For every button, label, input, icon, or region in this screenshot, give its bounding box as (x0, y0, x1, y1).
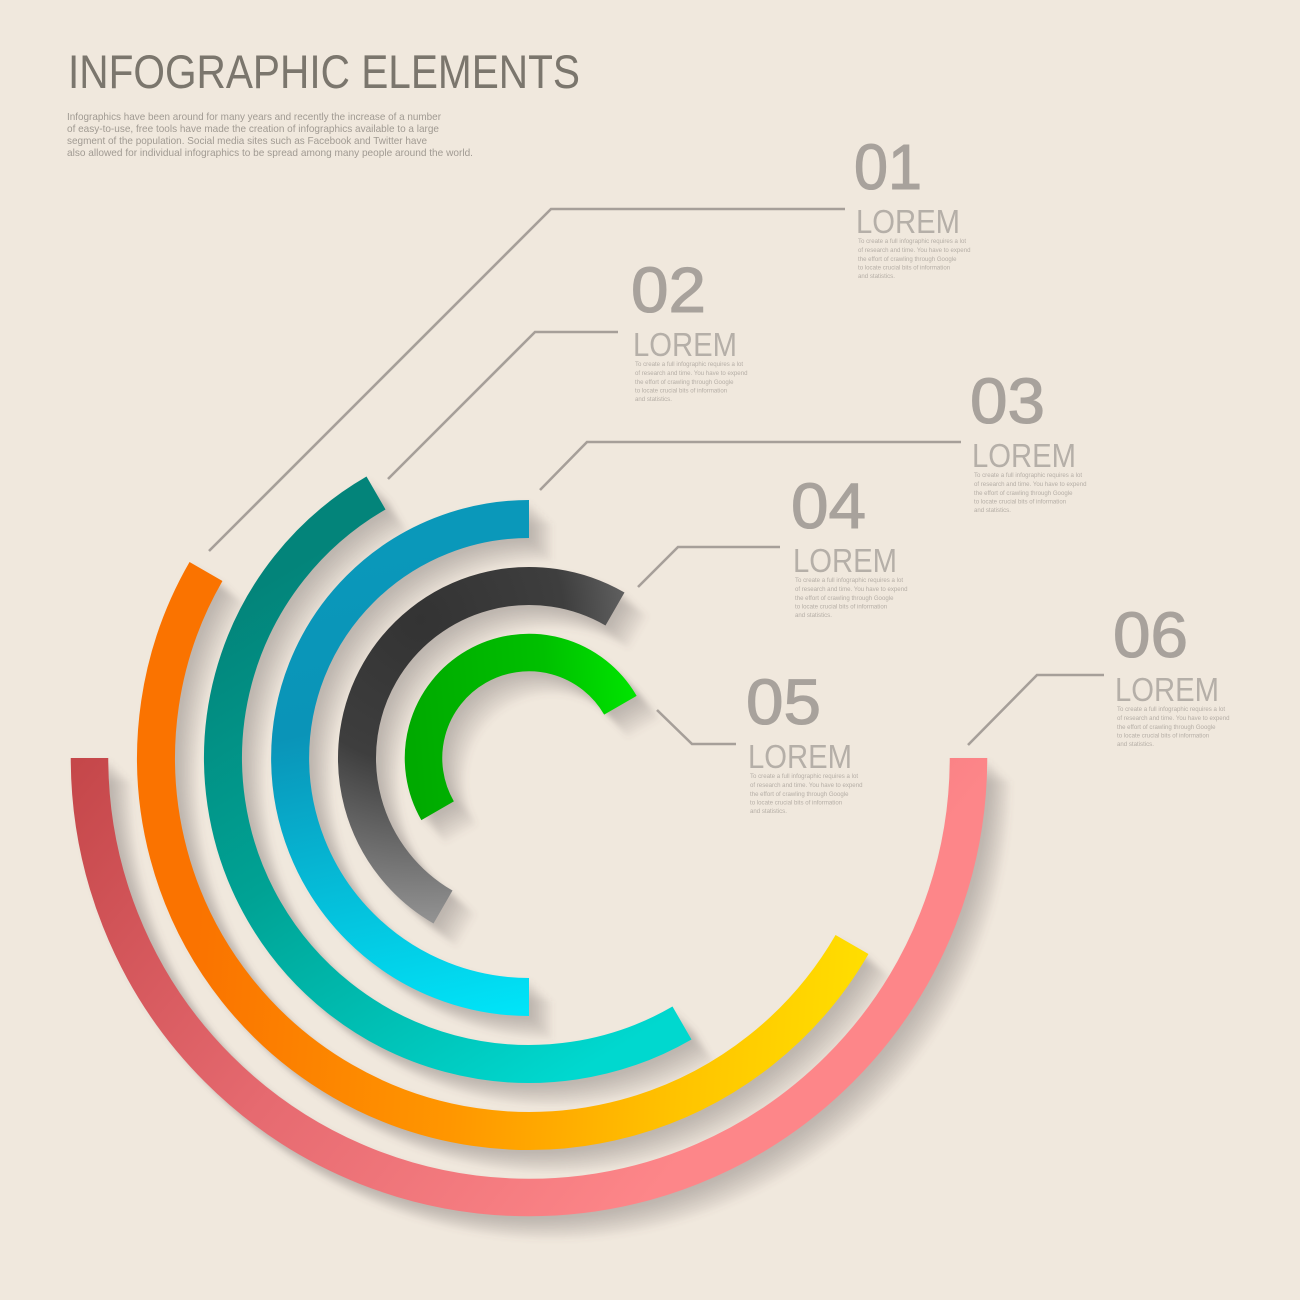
label 01: and statistics. (858, 273, 895, 280)
label 01: the effort of crawling through Google (858, 256, 957, 263)
label 05: LOREM (748, 738, 852, 775)
arc 02: teal (223, 493, 682, 1064)
intro text block: also allowed for individual infographics to be spread among many people around the world. (67, 148, 473, 159)
label 02 (631, 254, 747, 403)
intro text block (67, 112, 473, 159)
title: INFOGRAPHIC ELEMENTS (68, 45, 580, 98)
label 01: LOREM (856, 203, 960, 240)
label 02: To create a full infographic requires a lot (635, 361, 743, 368)
label 05: To create a full infographic requires a lot (750, 773, 858, 780)
label 04: To create a full infographic requires a lot (795, 577, 903, 584)
label 05: 05 (746, 666, 821, 738)
label 03: 03 (970, 365, 1045, 437)
label 06: of research and time. You have to expend (1117, 715, 1229, 722)
label 03: To create a full infographic requires a lot (974, 472, 1082, 479)
leader line 03 (540, 442, 961, 490)
label 03: and statistics. (974, 507, 1011, 514)
label 05: the effort of crawling through Google (750, 791, 849, 798)
arc 06: red to pink (90, 758, 968, 1198)
label 02: of research and time. You have to expend (635, 370, 747, 377)
label 06: 06 (1113, 599, 1188, 671)
leader line 02 (388, 332, 618, 479)
arc 05: green (424, 653, 620, 811)
leader line 05 (657, 710, 736, 744)
arc 01: orange to yellow (156, 572, 852, 1131)
label 03: LOREM (972, 437, 1076, 474)
label 03 (970, 365, 1086, 514)
label 05: to locate crucial bits of information (750, 800, 842, 806)
leader line 04 (638, 547, 780, 587)
arc shadows (92, 496, 992, 1220)
label 05: and statistics. (750, 808, 787, 815)
intro text block: segment of the population. Social media sites such as Facebook and Twitter have (67, 136, 427, 147)
label 01: To create a full infographic requires a lot (858, 238, 966, 245)
label 02: the effort of crawling through Google (635, 379, 734, 386)
label 02: to locate crucial bits of information (635, 388, 727, 394)
label 03: the effort of crawling through Google (974, 490, 1073, 497)
leader line 01 (209, 209, 845, 551)
label 01: of research and time. You have to expend (858, 247, 970, 254)
label 02: LOREM (633, 326, 737, 363)
label 06: to locate crucial bits of information (1117, 732, 1209, 740)
label 06: LOREM (1115, 671, 1219, 708)
label 04: 04 (791, 470, 866, 542)
label 06: To create a full infographic requires a lot (1117, 706, 1225, 713)
intro text block: Infographics have been around for many years and recently the increase of a number (67, 112, 442, 123)
label 01 (854, 131, 970, 280)
label 01: 01 (854, 131, 922, 203)
arc 04: dark grey (357, 586, 615, 907)
intro text block: of easy-to-use, free tools have made the creation of infographics available to a large (67, 124, 439, 135)
label 05 (746, 666, 862, 815)
label 04: and statistics. (795, 612, 832, 619)
label 06 (1113, 599, 1229, 748)
label 04: the effort of crawling through Google (795, 595, 894, 602)
label 05: of research and time. You have to expend (750, 782, 862, 789)
label 04: LOREM (793, 542, 897, 579)
label 04: to locate crucial bits of information (795, 604, 887, 610)
label 02: 02 (631, 254, 706, 326)
label 03: to locate crucial bits of information (974, 498, 1066, 506)
label 06: and statistics. (1117, 741, 1154, 748)
arc 03: blue to cyan (290, 519, 529, 997)
label 02: and statistics. (635, 396, 672, 403)
label 06: the effort of crawling through Google (1117, 724, 1216, 731)
label 04 (791, 470, 907, 619)
leader line 06 (968, 675, 1104, 745)
label 03: of research and time. You have to expend (974, 481, 1086, 488)
label 04: of research and time. You have to expend (795, 586, 907, 593)
label 01: to locate crucial bits of information (858, 264, 950, 272)
